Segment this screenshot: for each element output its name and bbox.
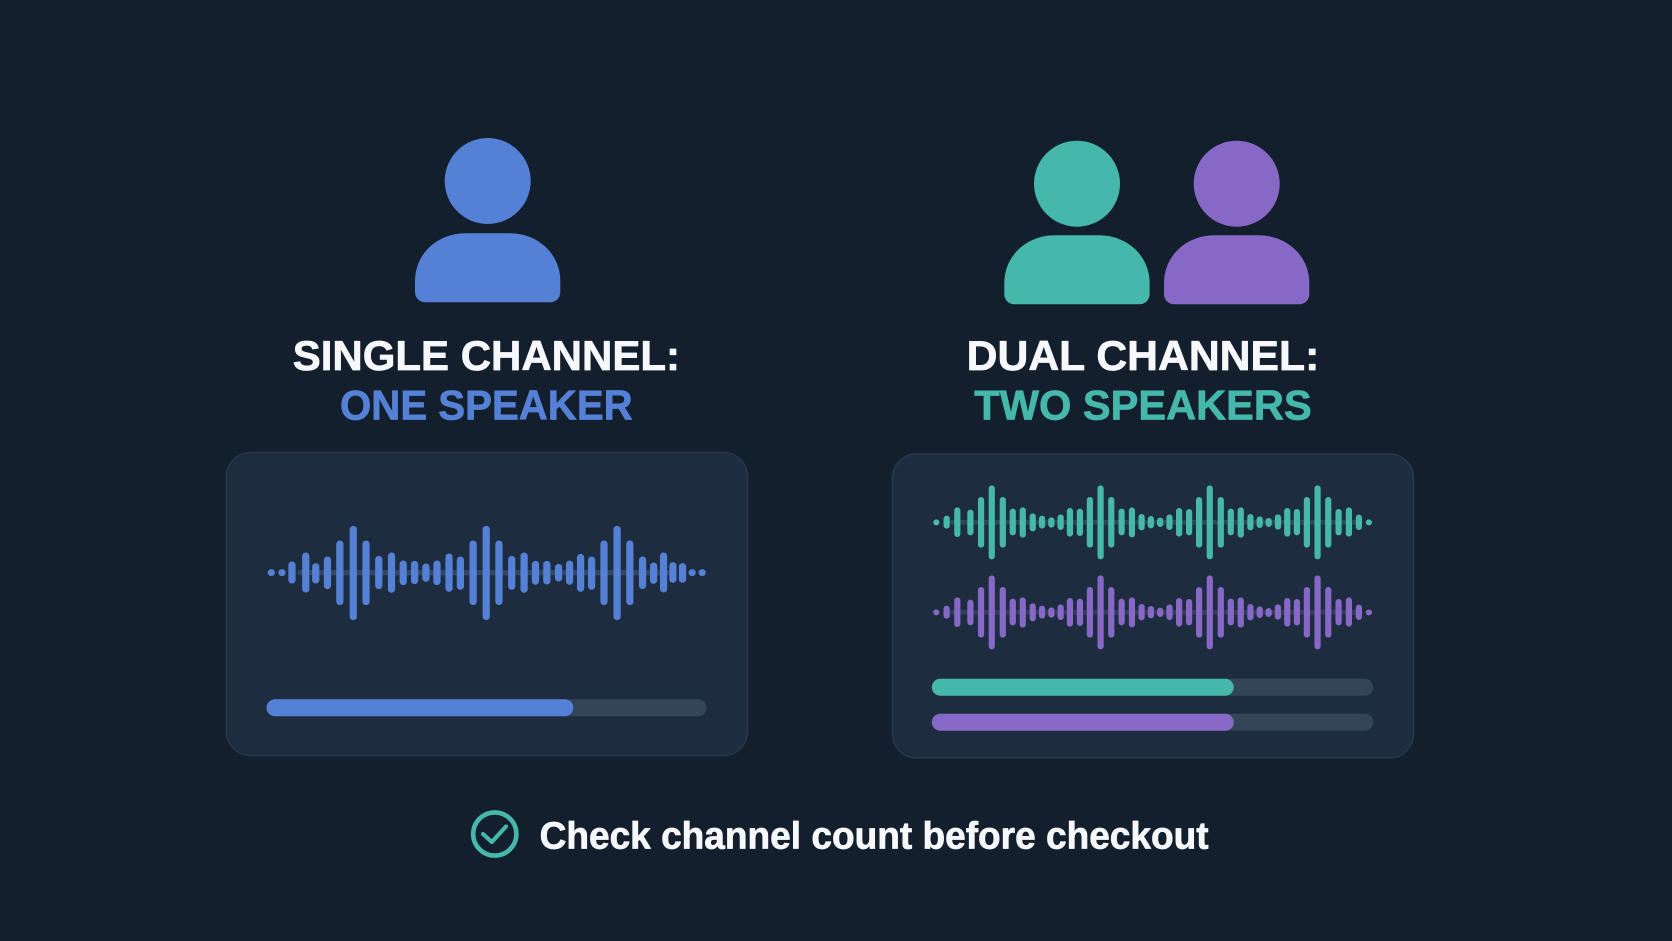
icon: teal speaker [1004,141,1150,304]
heading: dual channel: DUAL CHANNEL: [967,332,1319,379]
panel: single channel audio [226,452,748,756]
waveform: teal speaker [936,488,1369,556]
panel: dual channel audio [892,454,1414,758]
icon: single speaker [415,138,560,302]
subheading: two speakers: TWO SPEAKERS [974,382,1312,428]
waveform: single speaker [271,529,702,617]
column: dual channel [892,141,1414,758]
subheading: one speaker: ONE SPEAKER [340,382,633,428]
progress bar: purple speaker [932,714,1373,731]
callout text: Check channel count before checkout [540,816,1209,858]
callout: check channel count [473,812,1209,858]
progress bar: single speaker [266,699,706,716]
heading: single channel: SINGLE CHANNEL: [293,332,680,379]
waveform: purple speaker [936,578,1369,646]
progress bar: teal speaker [932,679,1373,696]
icon: purple speaker [1164,141,1309,304]
icon: check mark in circle [473,812,516,856]
column: single channel [226,138,748,756]
